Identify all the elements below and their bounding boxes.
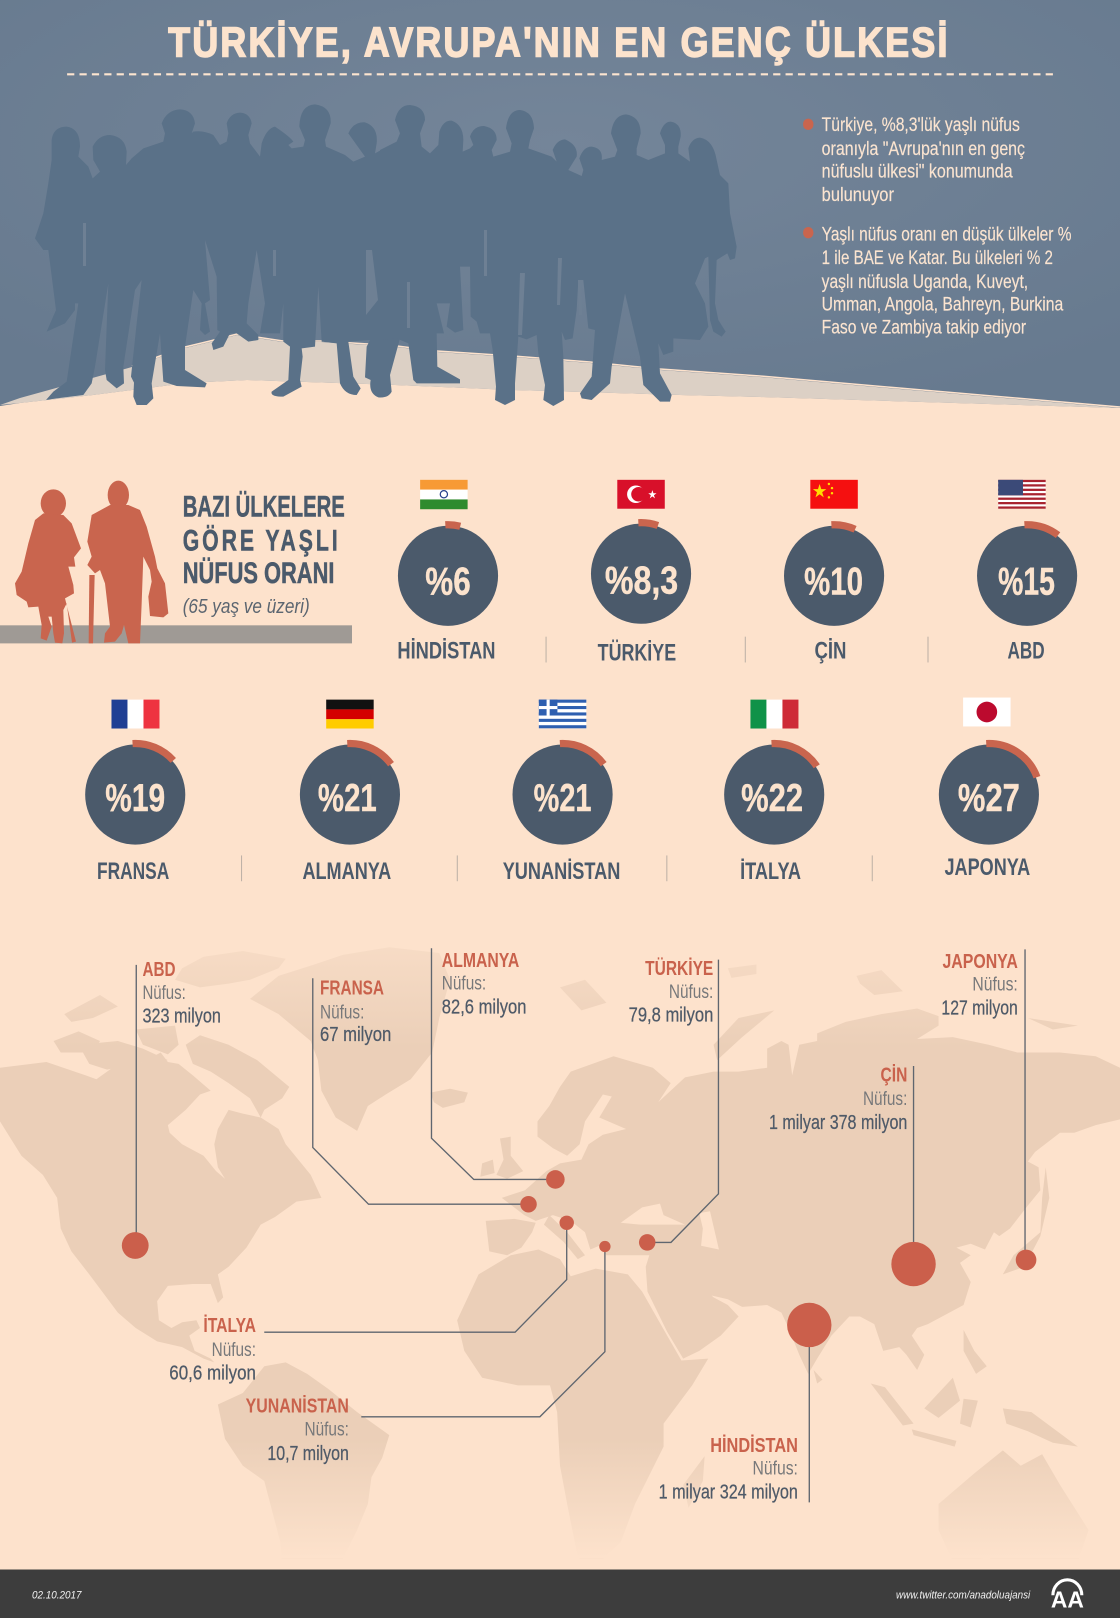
- Germany: [296, 700, 404, 885]
- callout: Türkiye: 79,8 milyon: [629, 1005, 713, 1027]
- China: %10: [804, 560, 863, 603]
- USA: %15: [998, 560, 1055, 603]
- callout: Hindistan: 1 milyar 324 milyon: [659, 1481, 798, 1503]
- Greece: YUNANİSTAN: [503, 858, 620, 885]
- Japan: %27: [958, 777, 1020, 820]
- Americas and Atlantic land: [0, 947, 536, 1611]
- leg gaps: [83, 223, 582, 335]
- Italy: [720, 700, 828, 885]
- callout: Çin: Nüfus:: [863, 1088, 907, 1110]
- bullet 1: nüfuslu ülkesi" konumunda: [822, 161, 1013, 182]
- ground bar: [0, 625, 352, 643]
- callout: Hindistan: HİNDİSTAN: [710, 1434, 798, 1457]
- callout: Almanya: ALMANYA: [442, 949, 519, 972]
- heading: NÜFUS ORANI: [183, 557, 334, 590]
- Japan: [935, 698, 1043, 881]
- France: [82, 700, 189, 885]
- Germany: ALMANYA: [302, 859, 391, 885]
- bullet 2: Faso ve Zambiya takip ediyor: [822, 317, 1027, 338]
- Turkey: TÜRKİYE: [598, 639, 676, 666]
- France: %19: [105, 777, 165, 820]
- heading: GÖRE YAŞLI: [183, 525, 341, 558]
- callout: Almanya: [431, 948, 565, 1189]
- heading: [183, 490, 345, 590]
- callout: İtalya: Nüfus:: [212, 1339, 256, 1361]
- bullet 2: 1 ile BAE ve Katar. Bu ülkeleri % 2: [822, 248, 1053, 269]
- bullet 1: oranıyla "Avrupa'nın en genç: [822, 139, 1025, 160]
- callout: Yunanistan: Nüfus:: [305, 1418, 349, 1440]
- China: ÇİN: [814, 637, 846, 664]
- panel: elderly population heading: [0, 481, 352, 643]
- callout: Yunanistan: 10,7 milyon: [267, 1443, 349, 1465]
- callout: Japonya: Nüfus:: [972, 974, 1018, 996]
- panel: header with silhouettes: [0, 0, 1120, 420]
- Eurasia, Africa and Oceania land: [457, 964, 1120, 1573]
- callout: Japonya: 127 milyon: [941, 997, 1018, 1019]
- Turkey: %8,3: [605, 559, 678, 602]
- callout: ABD: ABD: [142, 958, 176, 981]
- Turkey: [587, 480, 695, 666]
- bullet 1: bulunuyor: [822, 185, 894, 206]
- callout: İtalya: 60,6 milyon: [169, 1363, 256, 1385]
- logo: Anadolu Agency: AA: [1051, 1587, 1084, 1613]
- Italy: %22: [741, 777, 803, 820]
- China: [780, 480, 888, 664]
- callout: ABD: [122, 958, 221, 1259]
- Greece: [503, 700, 620, 885]
- bullet 2: Umman, Angola, Bahreyn, Burkina: [822, 295, 1064, 316]
- callout: Çin: [769, 1063, 936, 1286]
- callout: Fransa: Nüfus:: [320, 1001, 364, 1023]
- callout: Hindistan: [659, 1303, 831, 1503]
- callout: Yunanistan: YUNANİSTAN: [246, 1395, 349, 1418]
- callout: Fransa: FRANSA: [320, 977, 384, 1000]
- India: [394, 480, 502, 664]
- inland seas: [621, 1204, 719, 1250]
- callout: Japonya: JAPONYA: [942, 950, 1018, 973]
- Germany: %21: [318, 777, 377, 820]
- callout: Türkiye: Nüfus:: [669, 981, 713, 1003]
- map callouts: [122, 948, 1036, 1503]
- people silhouettes: [35, 104, 737, 406]
- Greece: %21: [534, 777, 591, 820]
- callout: Fransa: 67 milyon: [320, 1024, 391, 1046]
- USA: [973, 480, 1081, 664]
- callout: Çin: ÇİN: [881, 1063, 907, 1086]
- world map: [0, 934, 1120, 1611]
- callout: Çin: 1 milyar 378 milyon: [769, 1112, 907, 1134]
- callout: Fransa: [313, 977, 537, 1212]
- panel: country percentages row 1: [394, 480, 1081, 666]
- France: FRANSA: [97, 859, 169, 885]
- callout: Hindistan: Nüfus:: [753, 1458, 798, 1480]
- heading: BAZI ÜLKELERE: [183, 490, 345, 523]
- Italy: İTALYA: [740, 858, 801, 885]
- callout: ABD: 323 milyon: [142, 1006, 221, 1028]
- floor: [0, 334, 1120, 420]
- map fade: bottom: [0, 1439, 1120, 1558]
- website: www.twitter.com/anadoluajansi: [896, 1589, 1031, 1601]
- USA: ABD: [1007, 638, 1045, 664]
- callout: Türkiye: TÜRKİYE: [645, 957, 713, 980]
- bullet 1: Türkiye, %8,3'lük yaşlı nüfus: [822, 115, 1020, 136]
- bullet 2: yaşlı nüfusla Uganda, Kuveyt,: [822, 272, 1028, 293]
- callout: Yunanistan: [246, 1241, 611, 1465]
- icon: elderly couple: [15, 481, 168, 643]
- subheading: (65 yaş ve üzeri): [183, 595, 310, 618]
- callout: Japonya: [941, 949, 1036, 1270]
- title: TÜRKİYE, AVRUPA'NIN EN GENÇ ÜLKESİ: [168, 20, 950, 66]
- bullet 2: [803, 224, 1072, 338]
- India: %6: [425, 560, 471, 603]
- callout: Almanya: 82,6 milyon: [442, 996, 526, 1018]
- text block: key facts: [803, 115, 1072, 338]
- bullet 1: [803, 115, 1025, 206]
- panel: country percentages row 2: [82, 698, 1043, 885]
- callout: İtalya: [169, 1216, 574, 1385]
- callout: İtalya: İTALYA: [203, 1314, 256, 1337]
- callout: ABD: Nüfus:: [142, 982, 186, 1004]
- map fade: top: [0, 934, 1120, 1047]
- callout: Türkiye: [629, 957, 718, 1251]
- callout: Almanya: Nüfus:: [442, 973, 486, 995]
- date: 02.10.2017: [32, 1589, 82, 1601]
- Japan: JAPONYA: [945, 855, 1030, 881]
- footer: [0, 1570, 1120, 1618]
- India: HİNDİSTAN: [397, 637, 495, 664]
